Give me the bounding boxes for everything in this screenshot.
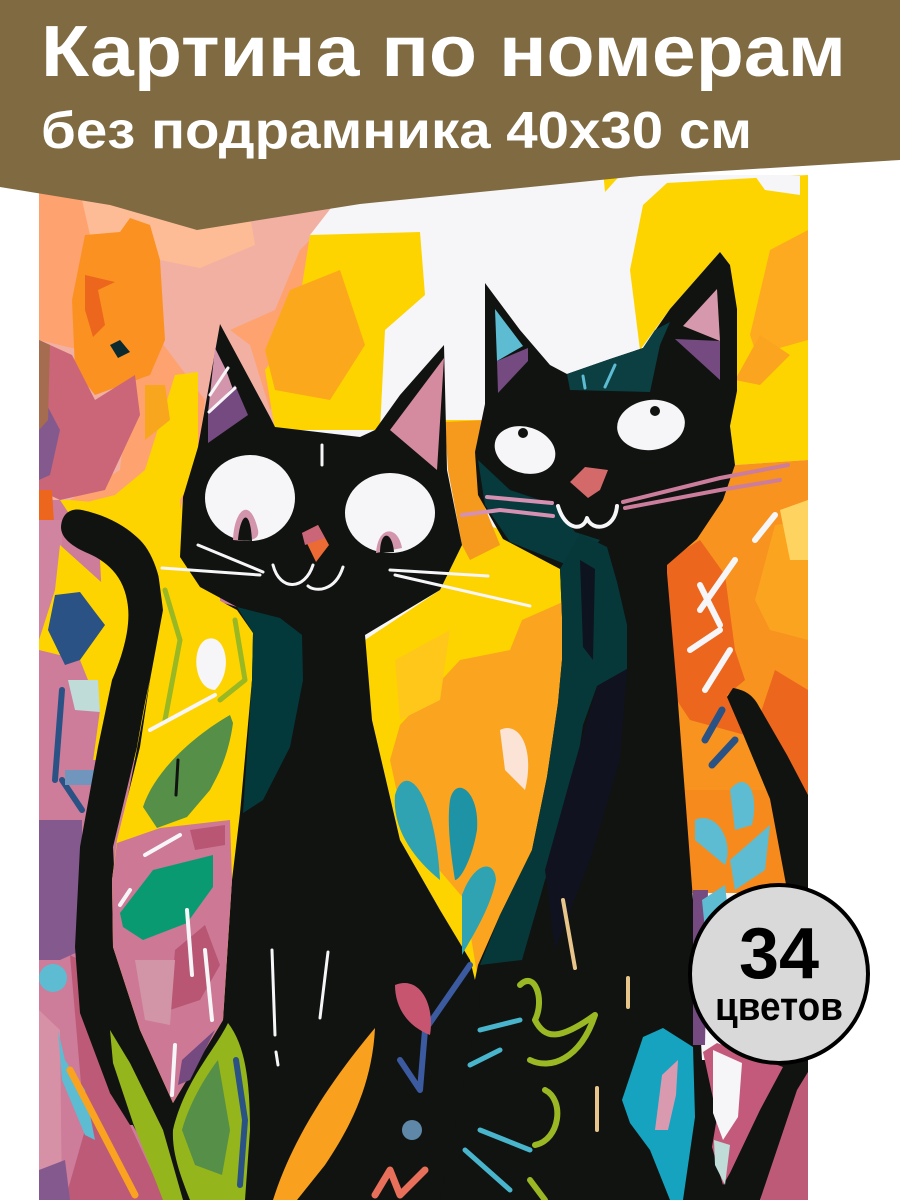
teal leaf <box>120 855 213 940</box>
right cat mouth and whiskers <box>462 465 788 527</box>
badge label: цветов <box>715 985 843 1029</box>
left cat teal chest <box>237 607 303 813</box>
orange side scribble <box>690 515 775 690</box>
painting background <box>39 170 808 1200</box>
left cat ears <box>208 348 235 413</box>
left cat eyes <box>205 455 435 553</box>
left cat nose <box>302 525 329 562</box>
white and pink petal <box>703 1043 783 1185</box>
lime blade <box>110 1030 183 1200</box>
olive oval leaf <box>173 1023 250 1200</box>
green leaf <box>143 715 233 828</box>
right cat head and body <box>430 252 808 1200</box>
orange leaf <box>273 1028 375 1200</box>
left cat petal area <box>112 572 253 1103</box>
pink background corner <box>760 1072 808 1200</box>
subtitle: без подрамника 40х30 см <box>41 102 752 160</box>
badge number: 34 <box>739 914 819 994</box>
title: Картина по номерам <box>41 12 846 92</box>
left petal white flower <box>196 638 226 690</box>
plants and leaves <box>110 515 808 1200</box>
blue flower bottom right <box>622 1028 695 1200</box>
painting: two black cats <box>39 170 808 1200</box>
right cat nose <box>570 467 608 498</box>
left cat <box>61 324 530 1200</box>
left cat mouth and whiskers <box>162 445 530 1065</box>
header banner <box>0 0 900 230</box>
right blue petals <box>695 782 770 890</box>
purple strip <box>693 890 708 1045</box>
teal flower petals <box>395 781 440 880</box>
right cat tail <box>727 688 808 895</box>
badge: 34 colours <box>690 885 868 1063</box>
left cat head and body <box>100 324 480 1200</box>
left cat tail <box>61 510 163 1125</box>
right cat eyes <box>488 396 688 481</box>
right cat ears <box>495 309 523 361</box>
right cat teal markings <box>567 322 670 392</box>
right cat <box>430 252 808 1200</box>
